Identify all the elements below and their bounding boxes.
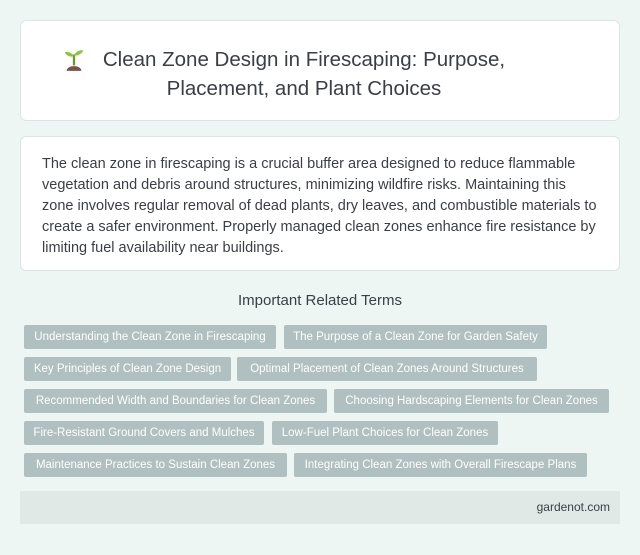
tags: Fire-Resistant Ground Covers and Mulches: [33, 427, 255, 439]
tags: Integrating Clean Zones with Overall Firescape Plans: [305, 459, 576, 471]
tags: The Purpose of a Clean Zone for Garden Safety: [293, 331, 538, 343]
description text: create a safer environment. Properly managed clean zones enhance fire resistance by: [42, 219, 596, 235]
description panel: [20, 136, 620, 271]
tags: Maintenance Practices to Sustain Clean Zones: [36, 459, 275, 471]
description text: limiting fuel availability near buildings.: [42, 240, 284, 256]
tags: Key Principles of Clean Zone Design: [34, 363, 221, 375]
description text: [42, 156, 597, 256]
title panel: [20, 20, 620, 121]
description text: vegetation and debris around structures, minimizing wildfire risks. Maintaining this: [42, 177, 566, 193]
description text: The clean zone in firescaping is a crucial buffer area designed to reduce flammable: [42, 156, 575, 172]
footer text: gardenot.com: [537, 500, 610, 514]
tags: Understanding the Clean Zone in Firescaping: [34, 331, 266, 343]
tags: Recommended Width and Boundaries for Clean Zones: [36, 395, 315, 407]
footer: [20, 491, 620, 524]
icon: seedling: [64, 50, 84, 71]
title: [103, 48, 505, 100]
tags: Choosing Hardscaping Elements for Clean Zones: [345, 395, 598, 407]
title: Clean Zone Design in Firescaping: Purpose,: [103, 48, 505, 71]
tags: Optimal Placement of Clean Zones Around Structures: [250, 363, 524, 375]
description text: zone involves regular removal of dead plants, dry leaves, and combustible materials to: [42, 198, 597, 214]
related terms heading: Important Related Terms: [238, 292, 402, 309]
title: Placement, and Plant Choices: [167, 77, 441, 100]
tags: Low-Fuel Plant Choices for Clean Zones: [282, 427, 488, 439]
